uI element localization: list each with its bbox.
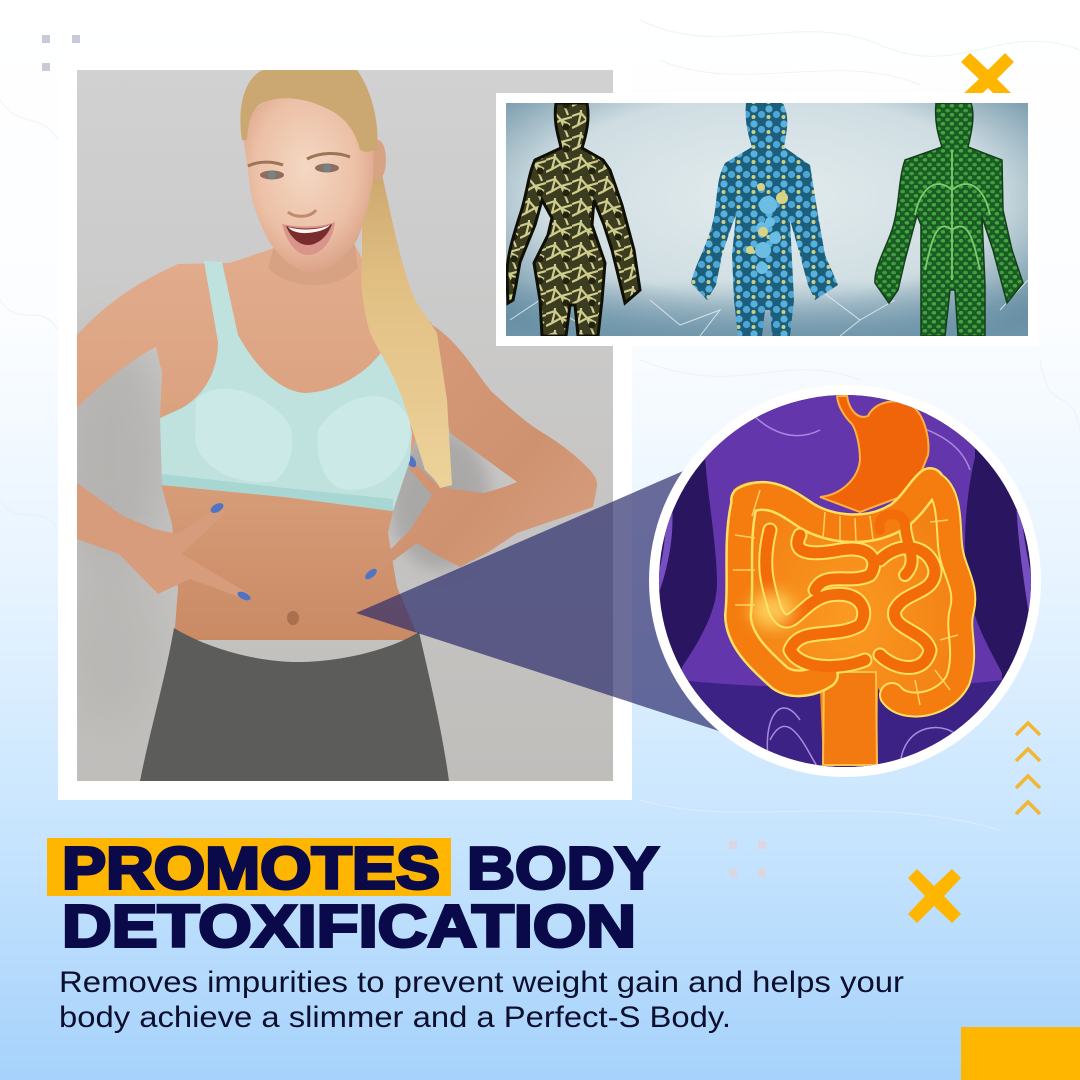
panel: body silhouettes [496, 93, 1039, 346]
icon: chevrons [1016, 723, 1040, 814]
neck [268, 244, 358, 285]
bright glow [750, 592, 794, 628]
rectum [823, 672, 877, 765]
photo [50, 70, 613, 781]
icon: yellow cross top right [961, 53, 1014, 93]
panel image [506, 103, 1028, 336]
silhouette: yellow body [507, 103, 640, 336]
decorative dots near title [729, 841, 766, 877]
eyes [260, 170, 284, 180]
ponytail [361, 150, 452, 488]
heading highlight [47, 838, 451, 896]
mouth [282, 222, 335, 255]
title [62, 836, 659, 960]
hair top [240, 70, 377, 152]
description line 2: body achieve a slimmer and a Perfect-S Body. [59, 1001, 731, 1034]
title line 1 second word: BODY [467, 836, 659, 902]
left hand [77, 483, 249, 599]
shorts [140, 628, 449, 781]
ear [373, 140, 386, 180]
photo frame [58, 50, 632, 800]
decorative dots top left [42, 35, 80, 71]
brows [248, 153, 350, 166]
intestine loops outline [738, 482, 963, 705]
sports bra [160, 261, 412, 511]
callout pointer triangle [356, 468, 725, 733]
silhouette: green body [875, 103, 1023, 336]
title line 1: PROMOTES [62, 836, 440, 902]
panel: woman photo [50, 50, 632, 800]
icon: yellow cross bottom right [908, 869, 961, 923]
title line 2: DETOXIFICATION [62, 894, 636, 960]
colon segment lines [733, 490, 958, 705]
intestine loops core [738, 482, 963, 705]
right arm and hand [390, 324, 598, 567]
corner yellow block [961, 1027, 1080, 1080]
esophagus and stomach [820, 396, 928, 512]
panel: digestive system circle [649, 385, 1041, 777]
torso [77, 240, 434, 640]
panel frame [496, 93, 1039, 346]
description text [59, 966, 904, 1034]
silhouette: blue body [691, 103, 838, 336]
navel [287, 611, 299, 625]
nose shadow [288, 210, 316, 216]
anatomy image [655, 390, 1035, 775]
intestine mass [732, 481, 950, 765]
description line 1: Removes impurities to prevent weight gain and helps your [59, 966, 904, 999]
nails [209, 453, 418, 602]
circle frame [649, 385, 1041, 777]
face [243, 92, 374, 273]
